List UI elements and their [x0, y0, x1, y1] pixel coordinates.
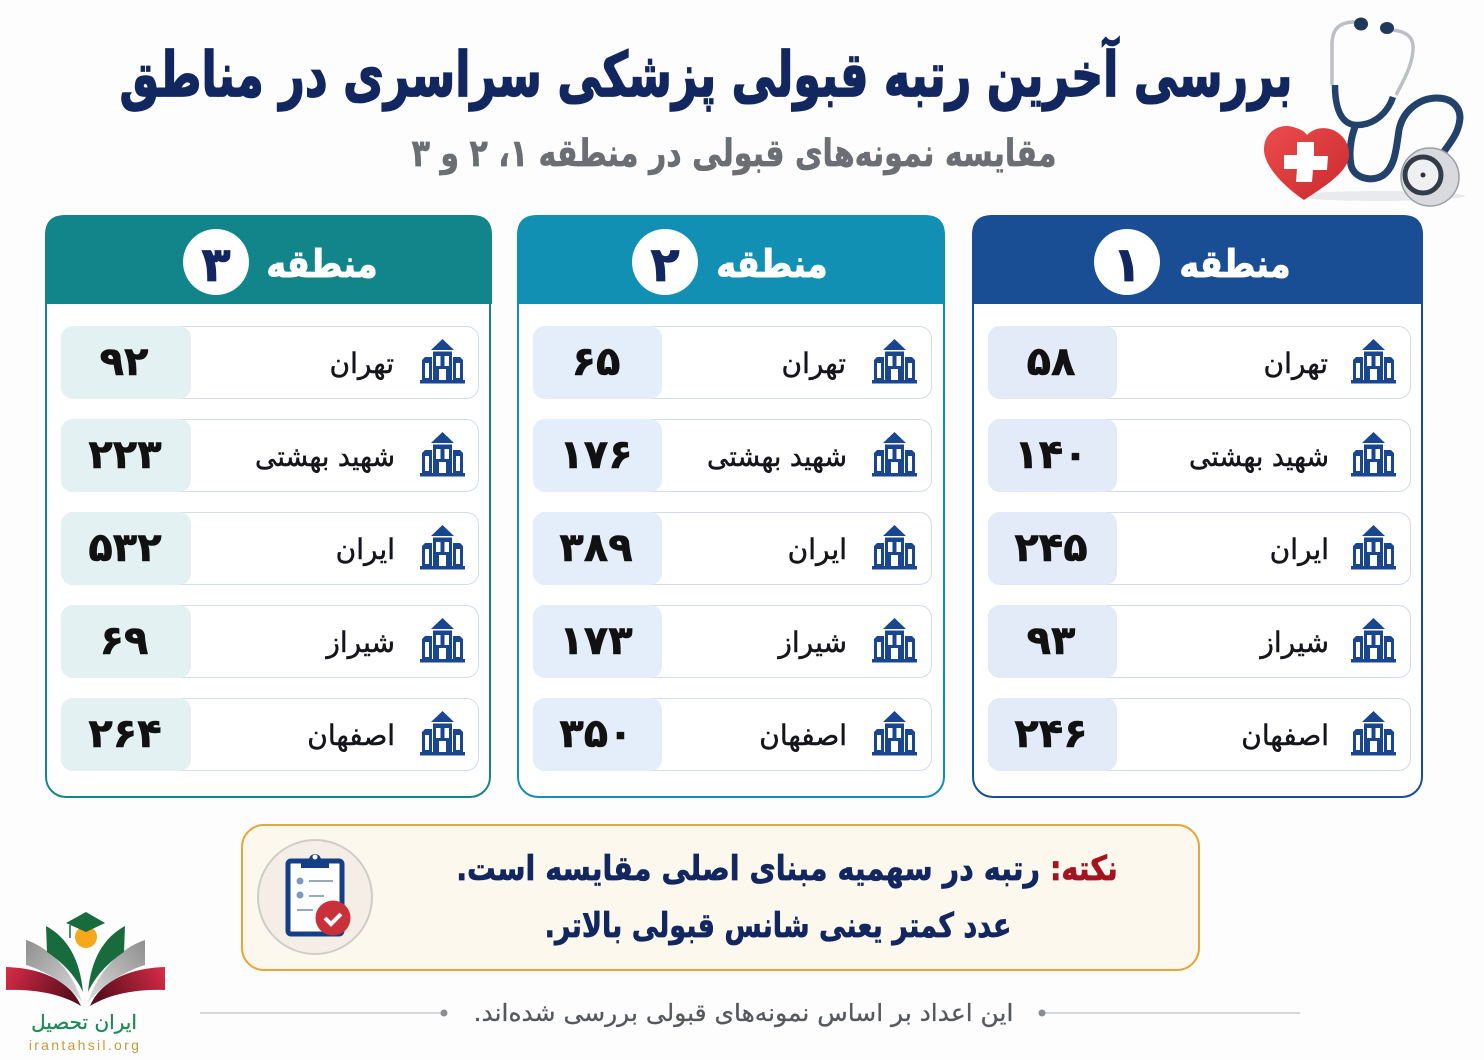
row: Shiraz — [988, 605, 1410, 678]
row: Isfahan: ۳۵۰ — [559, 711, 633, 757]
panel: region 2 — [517, 215, 945, 797]
icon: clipboard with check — [258, 840, 372, 954]
callout: note — [242, 825, 1199, 970]
title: بررسی آخرین رتبه قبولی پزشکی سراسری در مناطق — [120, 36, 1292, 111]
row: Tehran: تهران — [1264, 347, 1328, 380]
panel header: region 3: منطقه — [266, 243, 378, 287]
row: Isfahan: ۲۶۴ — [88, 711, 162, 757]
logo: Iran Tahsil: irantahsil.org — [29, 1037, 141, 1053]
row: Isfahan — [988, 698, 1410, 771]
row: Isfahan: اصفهان — [759, 719, 847, 752]
row: Shahid Beheshti: ۱۴۰ — [1014, 432, 1088, 478]
row: Shiraz: ۱۷۳ — [559, 618, 633, 664]
row: Iran: ۲۴۵ — [1014, 525, 1088, 571]
row: Shahid Beheshti: شهید بهشتی — [255, 442, 395, 473]
row: Shahid Beheshti: ۱۷۶ — [559, 432, 633, 478]
logo: Iran Tahsil — [6, 912, 165, 1053]
panel header: region 1: منطقه — [1179, 243, 1291, 287]
heart — [1264, 126, 1349, 200]
row: Tehran: ۵۸ — [1027, 339, 1075, 385]
row: Shiraz — [533, 605, 932, 678]
row: Shiraz: شیراز — [324, 626, 395, 659]
row: Iran: ایران — [788, 533, 847, 566]
row: Shiraz — [61, 605, 478, 678]
row: Shahid Beheshti — [533, 419, 932, 492]
row: Isfahan: اصفهان — [1241, 719, 1329, 752]
row: Tehran: تهران — [330, 347, 394, 380]
panel header: region 1 — [972, 215, 1423, 304]
row: Tehran: ۶۵ — [572, 339, 620, 385]
row: Tehran — [988, 326, 1410, 399]
row: Iran: ایران — [1270, 533, 1329, 566]
row: Iran — [988, 512, 1410, 585]
panel: region 1 — [972, 215, 1423, 797]
row: Tehran: ۹۲ — [100, 339, 148, 385]
panel: region 3 — [45, 215, 492, 797]
row: Isfahan — [533, 698, 932, 771]
panel header: region 3: ۳ — [201, 237, 231, 293]
note text line 1: نکته: رتبه در سهمیه مبنای اصلی مقایسه است. — [456, 850, 1118, 889]
note text line 2: عدد کمتر یعنی شانس قبولی بالاتر. — [545, 906, 1011, 946]
panel header: region 1: ۱ — [1112, 237, 1142, 293]
row: Isfahan: ۲۴۶ — [1014, 711, 1088, 757]
row: Iran: ۳۸۹ — [559, 525, 633, 571]
row: Shahid Beheshti: ۲۲۳ — [88, 432, 162, 478]
row: Shahid Beheshti: شهید بهشتی — [707, 442, 847, 473]
panel header: region 3 — [45, 215, 492, 304]
subtitle: مقایسه نمونه‌های قبولی در منطقه ۱، ۲ و ۳ — [412, 132, 1056, 176]
row: Shahid Beheshti — [988, 419, 1410, 492]
row: Shiraz: ۶۹ — [100, 618, 148, 664]
row: Shahid Beheshti: شهید بهشتی — [1189, 442, 1329, 473]
row: Iran: ۵۳۲ — [88, 525, 162, 571]
row: Tehran — [61, 326, 478, 399]
row: Shiraz: ۹۳ — [1027, 618, 1075, 664]
row: Isfahan: اصفهان — [307, 719, 395, 752]
icon: stethoscope and heart — [1264, 18, 1465, 206]
row: Iran — [61, 512, 478, 585]
row: Shiraz: شیراز — [1258, 626, 1329, 659]
logo: Iran Tahsil: ایران تحصیل — [31, 1010, 137, 1034]
footer note — [200, 998, 1300, 1027]
row: Tehran — [533, 326, 932, 399]
row: Isfahan — [61, 698, 478, 771]
panel header: region 2: منطقه — [716, 243, 828, 287]
row: Shahid Beheshti — [61, 419, 478, 492]
row: Tehran: تهران — [782, 347, 846, 380]
row: Shiraz: شیراز — [776, 626, 847, 659]
row: Iran: ایران — [336, 533, 395, 566]
panel header: region 2 — [517, 215, 945, 304]
row: Iran — [533, 512, 932, 585]
footer note: این اعداد بر اساس نمونه‌های قبولی بررسی شده‌اند. — [474, 998, 1013, 1027]
panel header: region 2: ۲ — [650, 237, 680, 293]
